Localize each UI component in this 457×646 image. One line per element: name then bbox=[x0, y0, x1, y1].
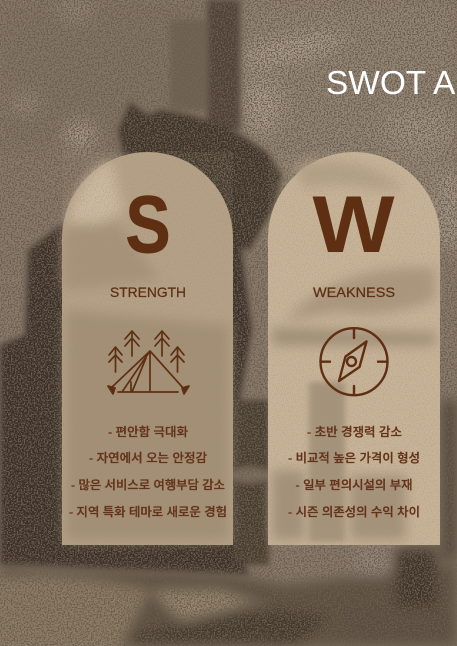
list: strength points: - 많은 서비스로 여행부담 감소 bbox=[71, 477, 225, 492]
label WEAKNESS: WEAKNESS bbox=[313, 284, 395, 300]
letter S: S bbox=[126, 180, 170, 270]
list: strength points: - 편안함 극대화 bbox=[108, 424, 188, 439]
list: strength points: - 자연에서 오는 안정감 bbox=[89, 451, 207, 465]
panel: strength bbox=[62, 152, 233, 545]
panel: weakness bbox=[268, 152, 440, 545]
letter W: W bbox=[312, 180, 395, 270]
list: strength points: - 지역 특화 테마로 새로운 경험 bbox=[69, 504, 227, 519]
icon: compass bbox=[320, 328, 388, 395]
label STRENGTH: STRENGTH bbox=[110, 284, 186, 300]
list: strength points bbox=[69, 424, 227, 519]
icon: tent and trees bbox=[108, 331, 189, 394]
list: weakness points: - 일부 편의시설의 부재 bbox=[296, 477, 412, 492]
list: weakness points: - 시즌 의존성의 수익 차이 bbox=[288, 505, 420, 519]
list: weakness points: - 비교적 높은 가격이 형성 bbox=[288, 450, 420, 465]
list: weakness points: - 초반 경쟁력 감소 bbox=[307, 425, 402, 439]
list: weakness points bbox=[288, 425, 420, 519]
